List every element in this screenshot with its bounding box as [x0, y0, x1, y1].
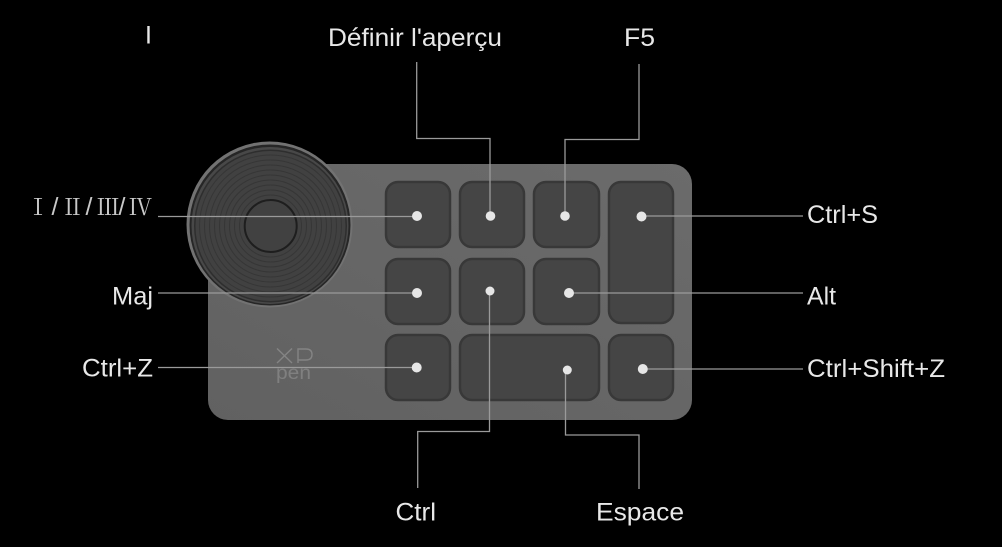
label: dial cycle: Ⅳ: [129, 195, 152, 220]
dial: [186, 142, 352, 308]
key markers: [412, 211, 648, 374]
label: Ctrl: Ctrl: [396, 498, 436, 526]
device body: [208, 164, 692, 420]
keys: [386, 182, 673, 400]
label: Maj: Maj: [112, 282, 153, 310]
logo: XP pen: [276, 348, 312, 384]
label: dial cycle: Ⅱ: [61, 195, 84, 220]
label: F5: F5: [624, 24, 655, 52]
label: dial cycle: Ⅰ: [26, 195, 50, 220]
label: Ctrl+S: Ctrl+S: [807, 201, 878, 229]
label: dial cycle: /: [118, 193, 126, 221]
label: dial cycle: /: [86, 193, 92, 221]
label: Ctrl+Z: Ctrl+Z: [82, 354, 153, 382]
label: Ctrl+Shift+Z: Ctrl+Shift+Z: [807, 355, 945, 383]
label: Alt: Alt: [807, 282, 836, 310]
dial centre button: [245, 200, 297, 252]
logo: XP pen: pen: [276, 363, 311, 384]
label: Espace: Espace: [596, 498, 684, 526]
label: dial cycle: /: [52, 193, 58, 221]
callout lines: [158, 62, 803, 489]
label: Définir l'aperçu: Définir l'aperçu: [328, 24, 502, 52]
label: dial mode: I: [145, 22, 152, 50]
label: dial cycle: Ⅲ: [96, 195, 120, 220]
device: shortcut remote: [186, 142, 692, 420]
